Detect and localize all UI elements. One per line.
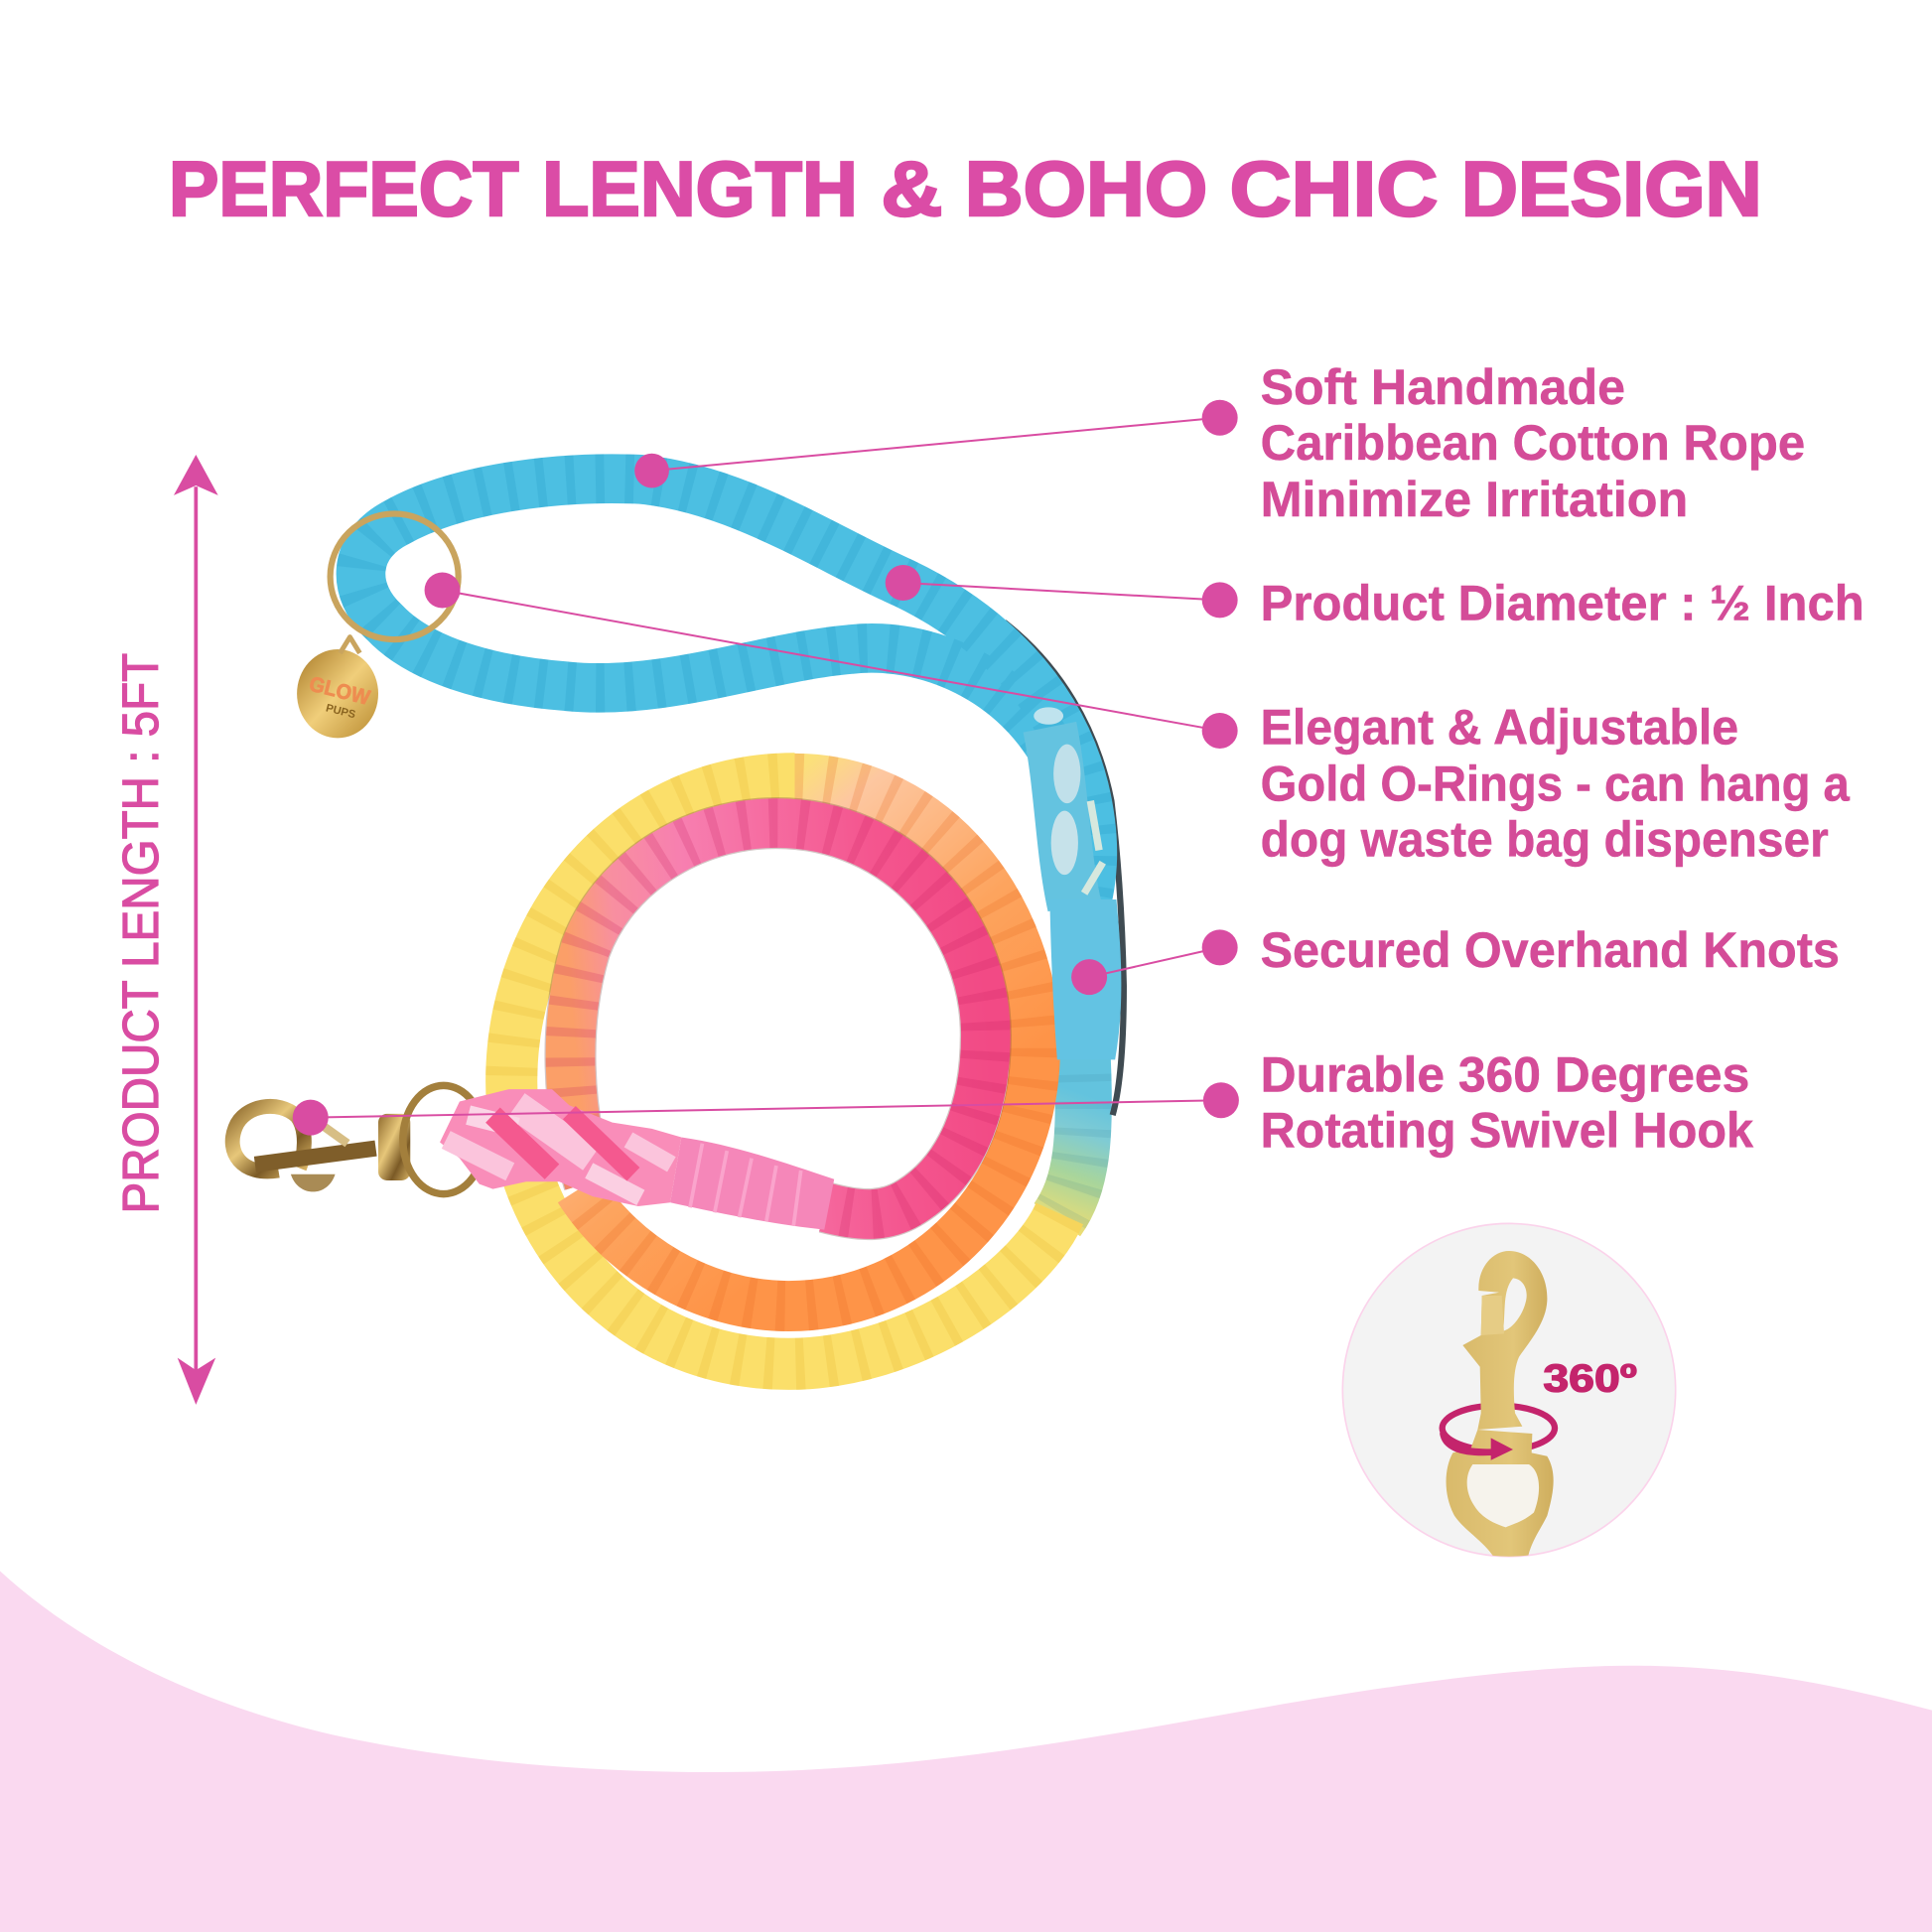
swivel hook inset (1342, 1223, 1676, 1561)
double arrow (174, 455, 218, 1405)
pink rope knot (440, 1089, 681, 1206)
brass hook (1447, 1251, 1554, 1561)
feature text: o-rings: Gold O-Rings - can hang a (1261, 757, 1850, 812)
feature text: knots: Secured Overhand Knots (1261, 922, 1840, 978)
title: BOHO (965, 145, 1207, 232)
gold charm tag (297, 637, 378, 738)
title: LENGTH (542, 145, 858, 232)
leash illustration (232, 479, 1124, 1364)
braided splice (1034, 707, 1103, 905)
title: & (881, 145, 942, 232)
rotation arrow front (1440, 1433, 1513, 1460)
callout: soft rope (634, 400, 1238, 487)
rope: yellow outer strand (511, 778, 1059, 1364)
callout: diameter (886, 565, 1238, 618)
feature text: rope: Caribbean Cotton Rope (1261, 415, 1805, 471)
title (169, 145, 1762, 232)
gold o-ring (331, 514, 459, 639)
title: PERFECT (169, 145, 518, 232)
feature text: rope: Minimize Irritation (1261, 472, 1688, 527)
feature text: o-rings: Elegant & Adjustable (1261, 700, 1738, 756)
right-side shadow (1004, 622, 1124, 1115)
feature text: diameter: Product Diameter : ½ Inch (1261, 575, 1864, 630)
feature text: swivel hook: Durable 360 Degrees (1261, 1047, 1749, 1103)
rope: orange strand (579, 778, 1035, 1307)
callout: swivel (293, 1082, 1239, 1136)
rope: blue to yellow transition (1057, 1047, 1083, 1220)
dimension label: PRODUCT LENGTH : 5FT (112, 653, 169, 1213)
title: DESIGN (1461, 145, 1762, 232)
blue thread wrap (1049, 899, 1121, 1059)
rotation ring back (1443, 1406, 1555, 1450)
pink thread wrap (670, 1138, 834, 1230)
title: CHIC (1230, 145, 1438, 232)
callout: o-rings (425, 572, 1238, 749)
360 label: 360º (1543, 1357, 1637, 1401)
product length dimension (112, 455, 218, 1405)
callout: knots (1071, 929, 1238, 995)
rope: blue handle loop (360, 479, 1092, 911)
callout lines and dots (293, 400, 1239, 1136)
feature text: o-rings: dog waste bag dispenser (1261, 812, 1829, 868)
feature text: o-rings (1261, 700, 1850, 868)
feature text: swivel hook: Rotating Swivel Hook (1261, 1102, 1753, 1158)
gold charm tag: GLOW (307, 673, 372, 710)
feature text: rope: Soft Handmade (1261, 359, 1625, 415)
pink wave background (0, 1571, 1932, 1932)
rope: inner pink strand (571, 823, 986, 1214)
gold charm tag: PUPS (325, 702, 356, 721)
swivel snap hook (232, 1085, 484, 1194)
feature text: rope (1261, 359, 1805, 527)
feature text: swivel hook (1261, 1047, 1753, 1158)
